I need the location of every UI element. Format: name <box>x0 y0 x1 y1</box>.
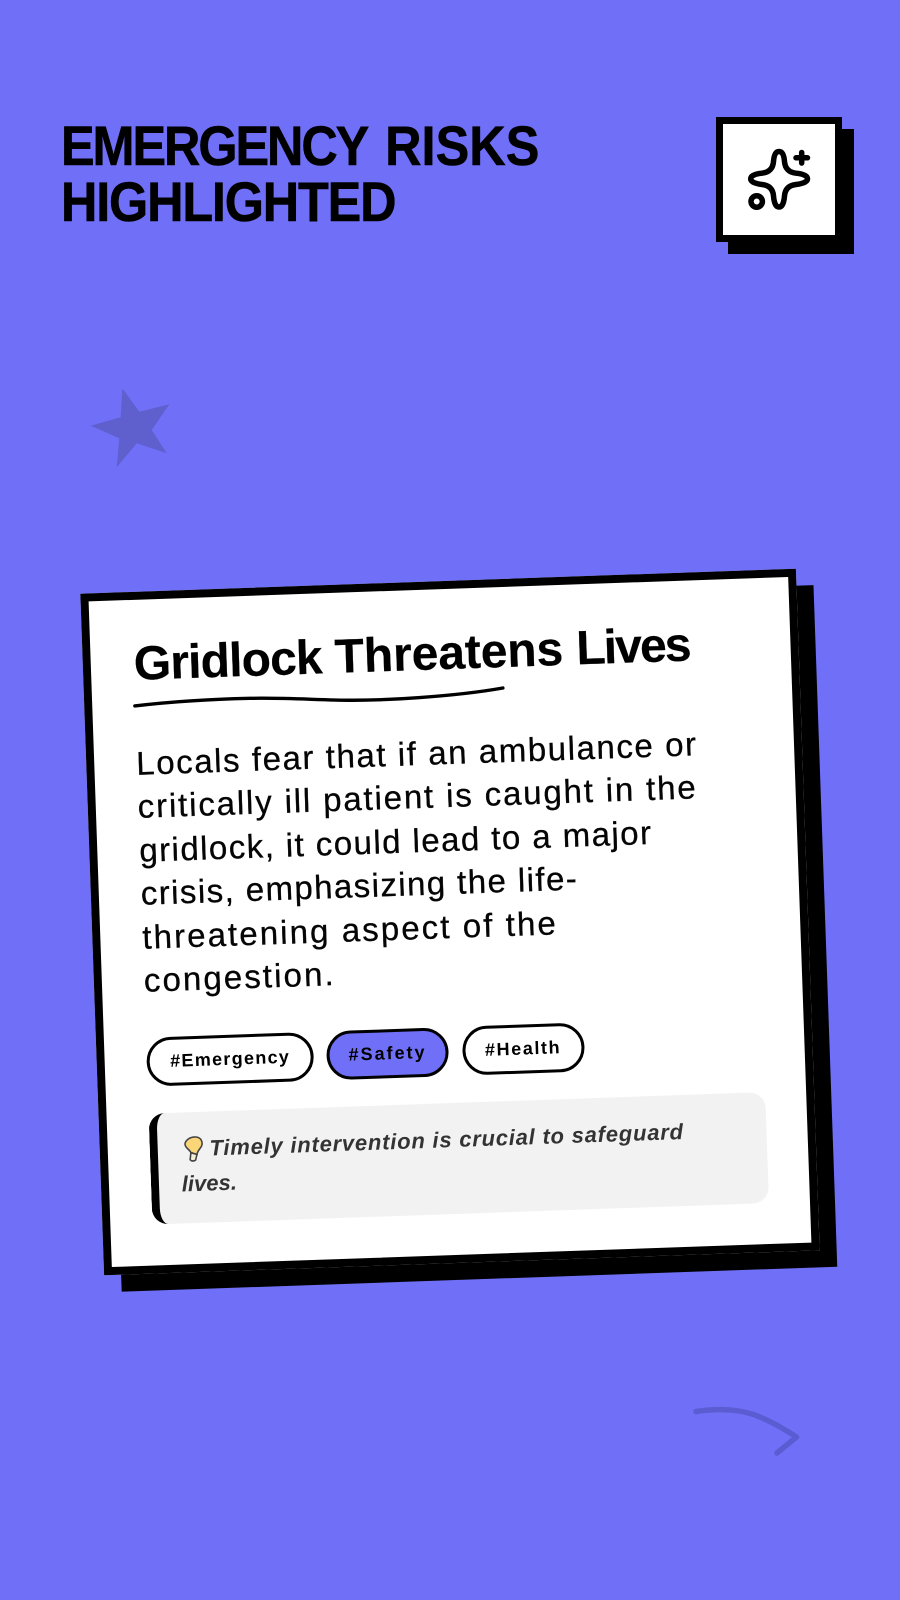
hand-drawn underline <box>133 686 505 708</box>
body text: gridlock, it could lead to a major <box>139 813 653 868</box>
tag: emergency <box>146 1031 314 1086</box>
body text: threatening aspect of the <box>142 904 558 955</box>
tag: safety <box>326 1027 449 1080</box>
decorative star <box>91 388 169 467</box>
callout text <box>181 1118 684 1196</box>
decorative arrow <box>693 1406 800 1456</box>
callout text: Timely intervention is crucial to safeguard <box>209 1118 684 1160</box>
icon: sparkle box <box>716 116 842 242</box>
tag: health: #Health <box>485 1037 561 1059</box>
title: HIGHLIGHTED <box>60 170 395 233</box>
icon: light bulb <box>184 1136 203 1162</box>
title: EMERGENCY RISKS <box>60 114 539 177</box>
card heading: Gridlock Threatens Lives <box>133 618 690 690</box>
body text <box>136 725 698 999</box>
callout text: lives. <box>181 1169 237 1196</box>
tag: emergency: #Emergency <box>170 1046 290 1070</box>
callout <box>148 1091 769 1224</box>
body text: Locals fear that if an ambulance or <box>136 725 698 781</box>
body text: congestion. <box>143 955 336 999</box>
tag: safety: #Safety <box>348 1041 427 1064</box>
title <box>60 114 539 233</box>
body text: critically ill patient is caught in the <box>137 768 698 825</box>
panel: gridlock card <box>80 568 820 1275</box>
body text: crisis, emphasizing the life- <box>140 859 579 912</box>
tag: health <box>461 1022 585 1075</box>
